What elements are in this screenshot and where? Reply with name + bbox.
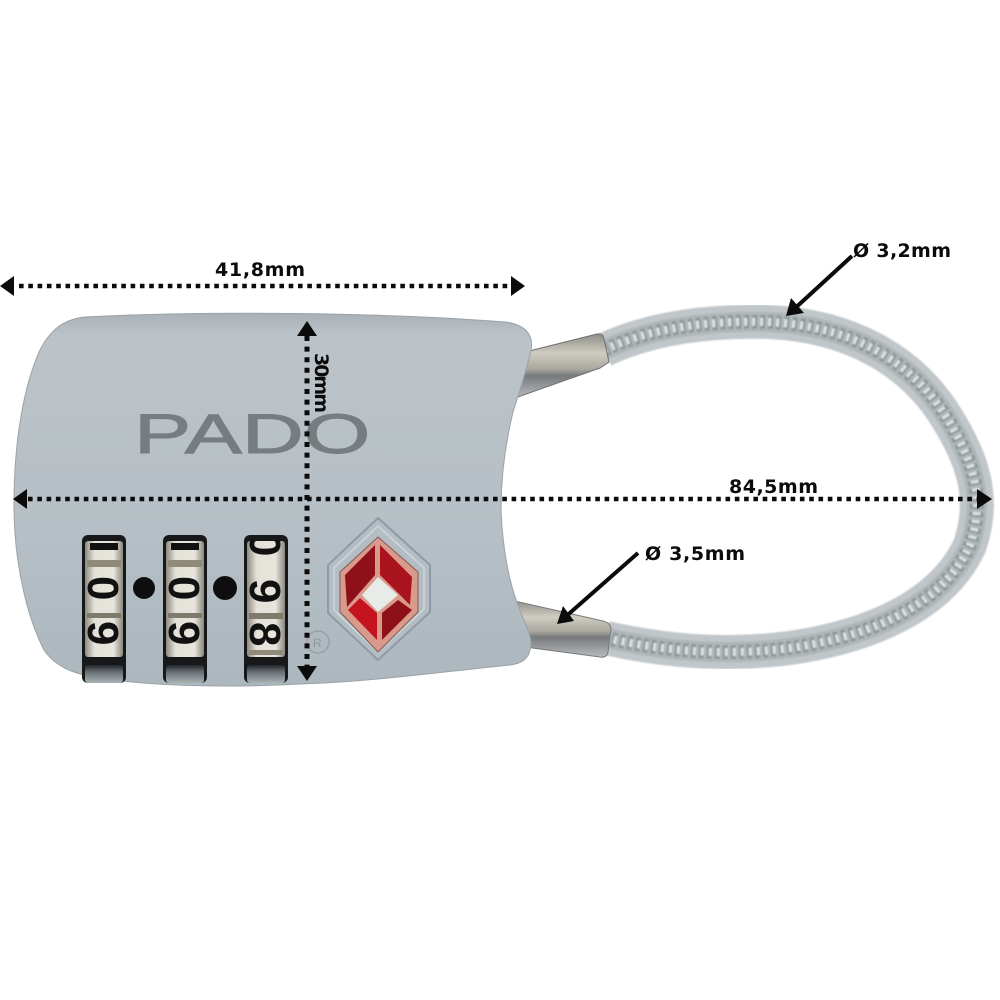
combination wheel 3: 0 <box>240 532 289 556</box>
callout: cable diameter 3,2mm: Ø 3,2mm <box>853 240 951 262</box>
upper cable sleeve <box>515 334 609 398</box>
combination wheel 2: 9 <box>159 621 208 645</box>
registered mark: R <box>313 636 322 650</box>
lock body <box>14 313 532 686</box>
combination wheel 3: 9 <box>240 579 289 603</box>
dimension: width 41,8mm <box>0 259 525 296</box>
combination wheel 1 <box>82 535 126 683</box>
brand logo: PADO: PADO <box>134 403 370 465</box>
combination wheel 1: 9 <box>78 621 127 645</box>
steel cable loop <box>604 322 977 652</box>
combination wheel 3 <box>244 535 288 683</box>
dimension: length 84,5mm: 84,5mm <box>729 476 818 498</box>
lower cable sleeve <box>510 600 611 657</box>
dimension: height 30mm <box>297 321 332 681</box>
callout: sleeve diameter 3,5mm <box>557 543 745 624</box>
TSA emblem <box>328 518 430 660</box>
dimension: height 30mm: 30mm <box>310 353 332 413</box>
dimension: width 41,8mm: 41,8mm <box>215 259 305 281</box>
registered mark <box>307 631 329 653</box>
combination wheel 2: 0 <box>159 576 208 600</box>
wheel separator dots <box>133 576 237 600</box>
callout: cable diameter 3,2mm <box>786 240 951 316</box>
combination wheel 1: 0 <box>78 576 127 600</box>
combination wheel 3: 8 <box>240 622 289 646</box>
combination wheel 2 <box>163 535 207 683</box>
callout: sleeve diameter 3,5mm: Ø 3,5mm <box>645 543 745 565</box>
dimension: length 84,5mm <box>13 476 992 509</box>
